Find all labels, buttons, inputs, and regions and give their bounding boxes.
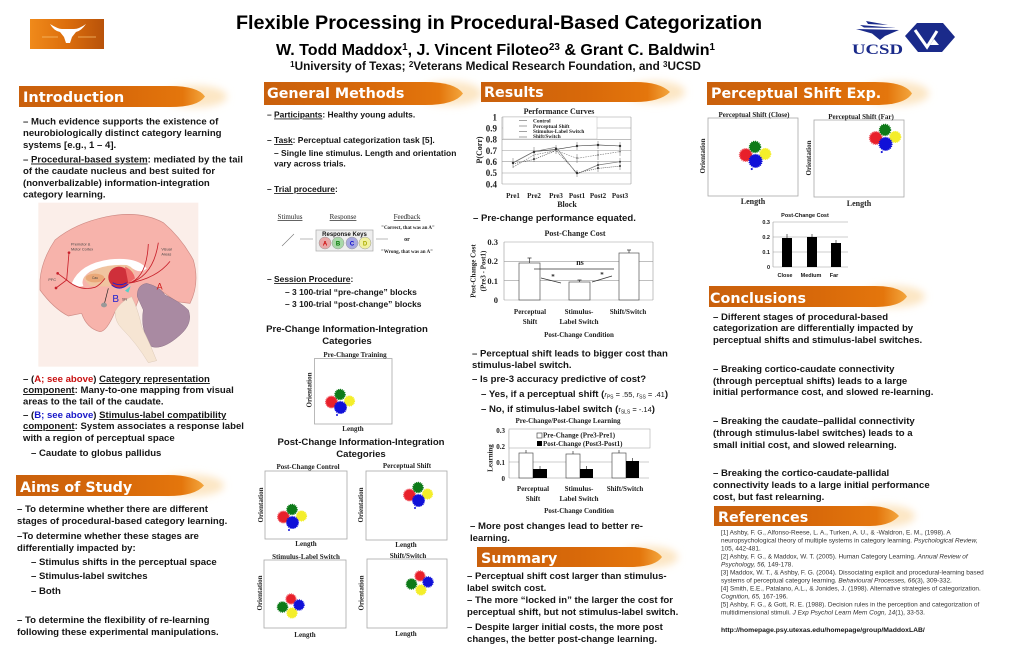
- bar chart: pre-change/post-change learning: 0: [502, 475, 506, 483]
- text: cost findings: = .41: [646, 390, 665, 399]
- heading: General Methods: General Methods: [267, 86, 404, 102]
- bar chart: pre-change/post-change learning: Learning: [486, 444, 494, 472]
- bar chart: post-change cost: Shift/Switch: [610, 308, 646, 316]
- heading: References: References: [718, 510, 808, 526]
- text: reference list: [1] Ashby, F. G., Alfonso-Reese, L. A., Turken, A. U., & -Waldron, E. M., (1998). A: [721, 530, 951, 536]
- diagram: trial procedure: Stimulus: [278, 213, 303, 221]
- scatter: perceptual shift: Orientation: [357, 487, 365, 522]
- text: aims: stages of procedural-based category learning.: [17, 516, 227, 527]
- text: reference list: Cognition, 65, 167-196.: [721, 594, 788, 600]
- scatter: stimulus-label switch: Length: [294, 631, 316, 639]
- bar chart: post-change cost: ns: [576, 258, 584, 267]
- text: pre-change performance equated: – Pre-change performance equated.: [473, 213, 636, 224]
- panel: introduction: [19, 86, 244, 459]
- diagram: trial procedure: "Correct, that was an A": [381, 226, 435, 231]
- bar chart: pre-change/post-change learning: 0.3: [496, 427, 506, 435]
- bar chart: post-change cost: Label Switch: [559, 318, 599, 326]
- scatter: perceptual shift: Length: [395, 541, 417, 549]
- scatter: perceptual shift: Perceptual Shift: [383, 462, 432, 470]
- authors: & Grant C. Baldwin: [560, 41, 710, 59]
- text: aims: – Both: [31, 586, 61, 597]
- text: cost findings: r: [637, 390, 640, 399]
- text: reference list: [3] Maddox, W. T., & Ashby, F. G. (2004). Dissociating explicit and procedural-learning based: [721, 570, 984, 576]
- bar chart: post-change cost: 0.1: [487, 276, 498, 286]
- scatter: pre-change training: [306, 351, 392, 433]
- affiliations: 1: [290, 60, 295, 69]
- line chart: performance curves: P(Corr): [475, 136, 484, 164]
- line chart: performance curves: Performance Curves: [524, 107, 594, 116]
- diagram: brain: B: [112, 294, 119, 305]
- text: summary: changes, the better post-change learning.: [467, 634, 657, 645]
- text: intro paragraphs: (nonverbalizable) information-integration: [23, 178, 210, 189]
- heading: Perceptual Shift Exp.: Perceptual Shift Exp.: [711, 86, 881, 102]
- heading: pre-change categories: Categories: [322, 336, 372, 347]
- diagram: brain: SN: [122, 297, 127, 301]
- heading: General Methods: [264, 82, 482, 106]
- line chart: performance curves: 0.8: [486, 134, 498, 144]
- text: summary: perceptual shift, but not stimulus-label switch.: [467, 607, 678, 618]
- text: aims: – To determine whether there are different: [17, 504, 209, 515]
- text: representation and compatibility components: – Caudate to globus pallidus: [31, 448, 161, 459]
- line chart: performance curves: [475, 107, 631, 209]
- text: conclusions: (through perceptual shifts) leads to a large: [713, 376, 907, 387]
- text: summary: – The more “locked in” the larger the cost for: [467, 595, 673, 606]
- bar chart: post-change cost: 0.2: [487, 256, 498, 266]
- bar chart: post-change cost by distance: 0: [767, 265, 770, 271]
- text: aims: – Stimulus shifts in the perceptual space: [31, 557, 217, 568]
- line chart: performance curves: 1: [492, 112, 498, 122]
- bar chart: post-change cost by distance: Close: [778, 273, 792, 279]
- heading: Results: [481, 81, 685, 103]
- bar chart: pre-change/post-change learning: Pre-Change/Post-Change Learning: [515, 417, 621, 425]
- text: cost findings: ): [665, 389, 668, 400]
- authors: W. Todd Maddox: [276, 41, 402, 59]
- bar chart: post-change cost: (Pre3 - Post1): [480, 250, 488, 291]
- text: reference list: neuropsychological theory of multiple systems in category learning. Psychological Review,: [721, 538, 978, 544]
- heading: Introduction: Introduction: [23, 90, 124, 106]
- text: reference list: [2] Ashby, F. G., & Maddox, W. T. (2005). Human Category Learning. Annual Review of: [721, 554, 969, 560]
- logo: UCSD: UCSD: [852, 42, 903, 58]
- scatter: stimulus-label switch: [256, 553, 346, 639]
- text: aims: – Stimulus-label switches: [31, 571, 148, 582]
- bar chart: post-change cost: 0: [494, 295, 498, 305]
- line chart: performance curves: Perceptual Shift: [533, 124, 570, 130]
- line chart: performance curves: Post2: [590, 192, 607, 200]
- diagram: trial procedure: A: [323, 242, 328, 248]
- scatter: stimulus-label switch: Stimulus-Label Switch: [272, 553, 340, 561]
- text: session procedure: – 3 100-trial “post-change” blocks: [285, 299, 422, 309]
- logo: UCSD: [852, 21, 903, 58]
- diagram: brain: Visual: [161, 248, 172, 252]
- diagram: trial procedure: "Wrong, that was an A": [381, 250, 433, 255]
- bar chart: post-change cost: Shift: [523, 318, 538, 326]
- text: cost findings: SLS: [621, 410, 631, 416]
- text: conclusions: connectivity leads to a large initial performance: [713, 480, 930, 491]
- text: session procedure: – 3 100-trial “pre-change” blocks: [285, 287, 417, 297]
- affiliations: 3: [663, 60, 668, 69]
- text: representation and compatibility components: component: System associates a response label: [23, 421, 244, 432]
- text: session procedure: [267, 274, 422, 309]
- text: reference list: [721, 530, 984, 616]
- diagram: brain: Premotor &: [71, 243, 91, 247]
- bar chart: post-change cost by distance: 0.2: [762, 235, 770, 241]
- bar chart: post-change cost by distance: 0.3: [762, 220, 770, 226]
- text: cost findings: = -.14: [630, 405, 652, 414]
- text: participants and task: – Single line stimulus. Length and orientation: [274, 148, 456, 158]
- diagram: brain: PFC: [48, 278, 56, 282]
- text: reference list: 105, 442-481.: [721, 546, 761, 552]
- bar chart: pre-change/post-change learning: Label Switch: [559, 495, 599, 503]
- diagram: trial procedure: Response Keys: [322, 232, 368, 238]
- line chart: performance curves: Pre1: [506, 192, 520, 200]
- scatter: pre-change training: Pre-Change Training: [323, 351, 387, 359]
- text: intro paragraphs: [23, 116, 243, 200]
- line chart: performance curves: Post3: [612, 192, 629, 200]
- text: reference list: multidimensional stimuli. J Exp Psychol Learn Mem Cogn, 14(1), 33-53.: [721, 610, 925, 616]
- diagram: brain: Cau: [92, 276, 98, 280]
- scatter: perceptual shift: [357, 462, 447, 549]
- text: reference list: Psychology, 56, 149-178.: [721, 562, 793, 568]
- line chart: performance curves: 0.7: [486, 146, 498, 156]
- bar chart: post-change cost: Post-Change Cost: [470, 244, 478, 298]
- text: conclusions: – Breaking the caudate–pallidal connectivity: [713, 416, 915, 427]
- scatter: post-change control: Post-Change Control: [276, 463, 340, 471]
- title: Flexible Processing in Procedural-Based Categorization: [236, 12, 762, 34]
- bar chart: pre-change/post-change learning: Post-Change Condition: [544, 507, 614, 515]
- text: aims: following these experimental manipulations.: [17, 627, 219, 638]
- text: reference list: systems of perceptual category learning. Behavioural Processes, 66(3), 309-332.: [721, 578, 952, 584]
- bar chart: pre-change/post-change learning: Pre-Change (Pre3-Pre1): [543, 432, 616, 440]
- bar chart: post-change cost by distance: Post-Change Cost: [781, 213, 829, 219]
- heading: Conclusions: Conclusions: [710, 291, 806, 307]
- authors: , J. Vincent Filoteo: [408, 41, 549, 59]
- text: conclusions: (through stimulus-label switches) leads to a: [713, 428, 913, 439]
- text: cost findings: [472, 348, 668, 416]
- bar chart: pre-change/post-change learning: [486, 417, 650, 515]
- text: summary: – Despite larger initial costs, the more post: [467, 622, 664, 633]
- line chart: performance curves: Pre3: [549, 192, 563, 200]
- text: representation and compatibility components: – (B; see above) Stimulus-label compatibility: [23, 410, 227, 421]
- line chart: performance curves: Block: [557, 200, 577, 209]
- text: conclusions: small initial cost, and slowed relearning.: [713, 440, 897, 451]
- text: conclusions: – Breaking the cortico-caudate-pallidal: [713, 468, 889, 479]
- text: cost findings: PS: [607, 394, 614, 400]
- scatter: pre-change training: Length: [342, 425, 364, 433]
- heading: post-change categories: Categories: [336, 449, 386, 460]
- text: re-learning finding: [470, 521, 643, 544]
- scatter: stimulus-label switch: Orientation: [256, 575, 264, 610]
- text: participants and task: [267, 110, 456, 194]
- text: participants and task: – Task: Perceptual categorization task [5].: [267, 135, 435, 145]
- diagram: trial procedure: [278, 213, 435, 255]
- panel: conclusions: [709, 286, 933, 503]
- heading: Aims of Study: [16, 474, 224, 496]
- diagram: brain: Areas: [161, 252, 171, 256]
- text: reference list: [4] Smith, E.E., Patalano, A.L., & Jonides, J. (1998). Alternative strategies of categorization.: [721, 586, 981, 592]
- text: conclusions: – Breaking cortico-caudate connectivity: [713, 364, 895, 375]
- line chart: performance curves: 0.4: [486, 180, 498, 190]
- scatter: perceptual shift close: Perceptual Shift (Close): [718, 111, 790, 119]
- heading: Perceptual Shift Exp.: [707, 82, 929, 106]
- scatter: post-change control: Orientation: [257, 487, 265, 522]
- bar chart: post-change cost: Post-Change Cost: [544, 229, 606, 238]
- bar chart: post-change cost by distance: Medium: [801, 273, 821, 279]
- bar chart: post-change cost: *: [551, 273, 555, 281]
- heading: pre-change categories: Pre-Change Information-Integration: [266, 324, 428, 335]
- affiliations: Veterans Medical Research Foundation, and: [413, 60, 663, 73]
- text: intro paragraphs: systems [e.g., 1 – 4].: [23, 140, 116, 151]
- scatter: shift/switch: Orientation: [358, 575, 366, 610]
- bar chart: pre-change/post-change learning: Shift: [526, 495, 541, 503]
- diagram: brain: Motor Cortex: [71, 248, 93, 252]
- bar chart: post-change cost by distance: [762, 213, 848, 279]
- scatter: perceptual shift far: Orientation: [805, 140, 813, 176]
- authors: 1: [402, 42, 408, 53]
- line chart: performance curves: 0.6: [486, 157, 498, 167]
- text: intro paragraphs: neurobiologically distinct category learning: [23, 128, 222, 139]
- text: cost findings: – Is pre-3 accuracy predictive of cost?: [472, 374, 646, 385]
- affiliations: University of Texas;: [295, 60, 409, 73]
- scatter: shift/switch: Length: [395, 630, 417, 638]
- text: summary: label switch cost.: [467, 583, 546, 594]
- line chart: performance curves: Post1: [569, 192, 586, 200]
- text: conclusions: – Different stages of procedural-based: [713, 312, 888, 323]
- scatter: pre-change training: Orientation: [306, 372, 314, 408]
- panel: aims of study: [16, 474, 227, 638]
- scatter: perceptual shift far: Length: [847, 199, 872, 208]
- line chart: performance curves: Stimulus-Label Switch: [533, 129, 584, 135]
- text: cost findings: – Perceptual shift leads to bigger cost than: [472, 348, 668, 360]
- text: conclusions: perceptual shifts and stimulus-label switches.: [713, 335, 922, 346]
- text: conclusions: initial performance cost, and slowed re-learning.: [713, 387, 933, 398]
- text: session procedure: – Session Procedure:: [267, 274, 353, 284]
- text: conclusions: cost, but fast relearning.: [713, 492, 824, 503]
- text: representation and compatibility components: – (A; see above) Category representation: [23, 374, 210, 385]
- authors: 23: [549, 42, 560, 53]
- diagram: trial procedure: or: [404, 237, 410, 243]
- text: aims: differentially impacted by:: [17, 543, 136, 554]
- panel: references: [714, 505, 984, 634]
- bar chart: post-change cost: [470, 229, 653, 339]
- scatter: post-change control: [257, 463, 347, 548]
- logo: University of Texas longhorn: [30, 19, 104, 49]
- scatter: shift/switch: Shift/Switch: [390, 552, 426, 560]
- diagram: trial procedure: C: [350, 242, 355, 248]
- text: cost findings: SS: [639, 394, 646, 400]
- text: aims: [17, 504, 227, 638]
- heading: Summary: Summary: [481, 551, 558, 567]
- bar chart: post-change cost: *: [600, 271, 604, 279]
- text: aims: –To determine whether these stages are: [17, 531, 199, 542]
- text: cost findings: – Yes, if a perceptual shift (r: [481, 389, 607, 400]
- scatter: shift/switch: [358, 552, 447, 638]
- text: participants and task: vary across trials.: [274, 158, 346, 168]
- heading: post-change categories: Post-Change Information-Integration: [277, 437, 445, 448]
- line chart: performance curves: 0.9: [486, 124, 498, 134]
- panel: summary: [467, 546, 678, 645]
- text: representation and compatibility components: areas to the tail of the caudate.: [23, 396, 164, 408]
- text: conclusions: [713, 312, 933, 503]
- heading: pre-change categories: [266, 324, 428, 347]
- diagram: trial procedure: B: [336, 242, 341, 248]
- text: conclusions: categorization are differentially impacted by: [713, 323, 914, 334]
- diagram: trial procedure: Response: [330, 213, 356, 221]
- heading: post-change categories: [277, 437, 445, 460]
- text: summary: – Perceptual shift cost larger than stimulus-: [467, 571, 667, 582]
- heading: Results: Results: [484, 85, 544, 101]
- diagram: trial procedure: D: [363, 242, 368, 248]
- text: intro paragraphs: – Much evidence supports the existence of: [23, 116, 219, 128]
- panel: general methods: [256, 82, 482, 639]
- text: intro paragraphs: category learning.: [23, 190, 106, 200]
- scatter: perceptual shift close: Length: [741, 197, 766, 206]
- text: representation and compatibility components: [22, 374, 244, 459]
- scatter: perceptual shift far: Perceptual Shift (Far): [828, 113, 894, 121]
- text: re-learning finding: – More post changes lead to better re-: [470, 521, 643, 532]
- heading: Introduction: [19, 86, 227, 108]
- text: participants and task: – Trial procedure:: [267, 184, 338, 194]
- scatter: perceptual shift close: Orientation: [699, 138, 707, 174]
- affiliations: UCSD: [668, 60, 701, 73]
- bar chart: post-change cost: Stimulus-: [565, 308, 594, 316]
- text: cost findings: = .55,: [614, 390, 637, 399]
- panel: results: [470, 81, 685, 544]
- line chart: performance curves: Shift/Switch: [533, 134, 561, 140]
- scatter: post-change control: Length: [295, 540, 317, 548]
- text: aims: – To determine the flexibility of re-learning: [17, 615, 210, 626]
- bar chart: pre-change/post-change learning: 0.1: [496, 459, 506, 467]
- authors: 1: [710, 42, 716, 53]
- bar chart: post-change cost by distance: Far: [830, 273, 839, 279]
- line chart: performance curves: Control: [533, 118, 551, 124]
- bar chart: pre-change/post-change learning: Post-Change (Post3-Post1): [543, 440, 623, 448]
- panel: perceptual shift experiment: [699, 82, 929, 279]
- scatter: perceptual shift far: [805, 113, 904, 208]
- text: cost findings: – No, if stimulus-label switch (r: [481, 404, 621, 415]
- bar chart: pre-change/post-change learning: Shift/Switch: [607, 485, 643, 493]
- diagram: brain: [38, 203, 198, 367]
- text: intro paragraphs: – Procedural-based system: mediated by the tail: [23, 154, 243, 166]
- text: representation and compatibility components: component: Many-to-one mapping from visual: [23, 385, 234, 396]
- heading: References: [714, 505, 915, 527]
- bar chart: post-change cost: Perceptual: [514, 308, 546, 316]
- diagram: trial procedure: Feedback: [394, 213, 421, 221]
- text: participants and task: – Participants: Healthy young adults.: [267, 110, 415, 120]
- bar chart: post-change cost by distance: 0.1: [762, 250, 770, 256]
- bar chart: post-change cost: 0.3: [487, 237, 498, 247]
- bar chart: pre-change/post-change learning: Perceptual: [517, 485, 549, 493]
- text: reference list: [5] Ashby, F. G., & Gott, R. E. (1988). Decision rules in the perception and categorization of: [721, 602, 979, 608]
- bar chart: pre-change/post-change learning: 0.2: [496, 443, 506, 451]
- text: cost findings: stimulus-label switch.: [472, 360, 572, 371]
- scatter: perceptual shift close: [699, 111, 798, 206]
- bar chart: post-change cost: Post-Change Condition: [544, 331, 614, 339]
- text: re-learning finding: learning.: [470, 533, 510, 544]
- line chart: performance curves: 0.5: [486, 168, 498, 178]
- affiliations: 2: [409, 60, 414, 69]
- line chart: performance curves: Pre2: [527, 192, 541, 200]
- text: lab URL: http://homepage.psy.utexas.edu/homepage/group/MaddoxLAB/: [721, 627, 925, 634]
- heading: Aims of Study: Aims of Study: [20, 480, 133, 496]
- text: intro paragraphs: of the caudate nucleus and best suited for: [23, 166, 215, 177]
- text: summary: [467, 571, 678, 645]
- diagram: brain: A: [157, 281, 163, 291]
- bar chart: pre-change/post-change learning: Stimulus-: [565, 485, 594, 493]
- heading: Summary: [477, 546, 678, 568]
- heading: Conclusions: [709, 286, 925, 308]
- text: representation and compatibility components: with a region of perceptual space: [22, 433, 175, 444]
- logo: VA: [905, 23, 955, 52]
- text: cost findings: ): [652, 404, 655, 415]
